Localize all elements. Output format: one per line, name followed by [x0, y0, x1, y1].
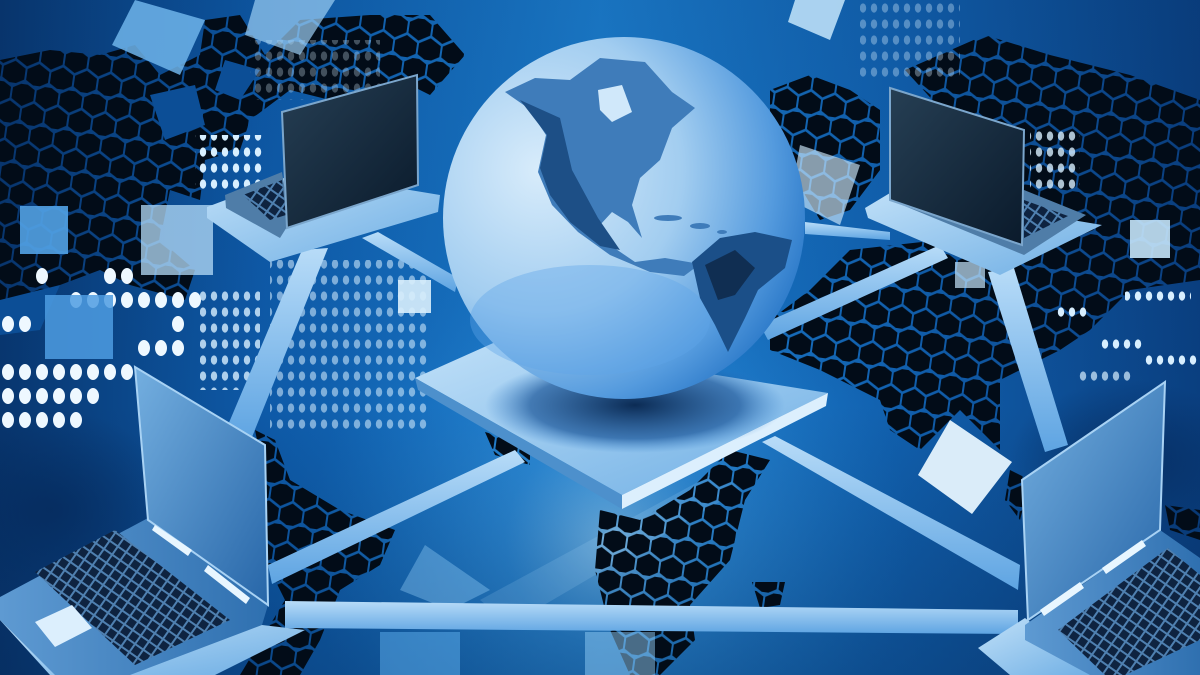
central platform — [415, 340, 828, 509]
white dot matrix — [0, 0, 1200, 432]
laptop: bottom right — [978, 382, 1200, 675]
connecting beams — [228, 222, 1068, 634]
holes in the mosaic map — [0, 60, 260, 335]
laptop: bottom left — [0, 367, 305, 675]
Caribbean islands — [654, 215, 727, 234]
coast shading: western North America — [520, 100, 620, 250]
Hudson Bay highlight — [598, 85, 632, 122]
laptop: top left — [207, 75, 440, 262]
South America dark interior — [705, 250, 755, 300]
continent: South America — [692, 232, 792, 352]
globe — [443, 37, 805, 399]
laptop: top right — [865, 88, 1102, 275]
continent: North America — [505, 58, 700, 276]
